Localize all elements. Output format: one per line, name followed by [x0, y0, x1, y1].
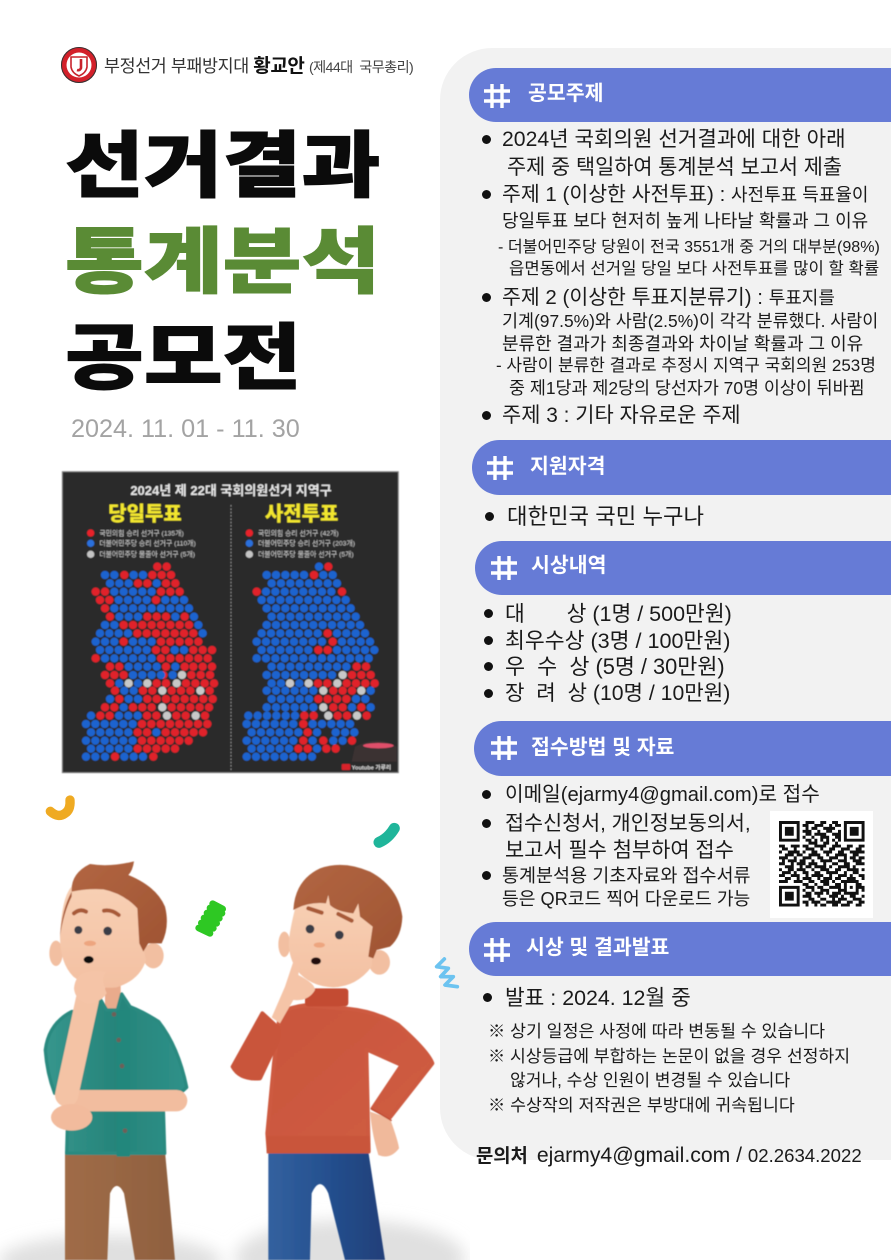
topic 2: 주제 2 (이상한 투표지분류기) : 투표지를 [502, 286, 835, 309]
label: 사전투표: 사전투표 [265, 498, 338, 527]
map watermark: Youtube 가루리 [352, 763, 391, 771]
header: logo and organisation [61, 47, 413, 83]
QR code [770, 811, 873, 918]
map: early votes [247, 567, 376, 757]
section: 공모주제: 주제 중 택일하여 통계분석 보고서 제출 [507, 156, 842, 179]
label: 당일투표: 당일투표 [108, 498, 182, 527]
heading bar: 지원자격 [530, 455, 605, 478]
legend: 국민의힘 승리 선거구 (42개) [258, 528, 339, 537]
section: 공모주제: - 사람이 분류한 결과로 추정시 지역구 국회의원 253명 [496, 356, 876, 375]
eligibility: 대한민국 국민 누구나 [507, 504, 704, 529]
illustration: two thinking men [0, 795, 468, 1260]
section: 시상 및 결과발표: 않거나, 수상 인원이 변경될 수 있습니다 [510, 1071, 790, 1090]
heading bar [469, 68, 891, 122]
section: 공모주제: 기계(97.5%)와 사람(2.5%)이 각각 분류했다. 사람이 [502, 311, 878, 331]
legend: 더불어민주당 물줄아 선거구 (5개) [258, 550, 354, 559]
section: 공모주제: 분류한 결과가 최종결과와 차이날 확률과 그 이유 [502, 334, 863, 354]
heading bar [475, 541, 891, 595]
notes: ※ 상기 일정은 사정에 따라 변동될 수 있습니다 [488, 1021, 825, 1041]
title line 1: 선거결과 [65, 107, 380, 212]
decorative shape: teal [379, 828, 394, 842]
topic 1: 주제 1 (이상한 사전투표) : 사전투표 득표율이 [502, 183, 868, 206]
legend [87, 528, 355, 559]
title line 3: 공모전 [65, 299, 301, 404]
required documents: 접수신청서, 개인정보동의서, [505, 812, 751, 835]
date range: 2024. 11. 01 - 11. 30 [71, 415, 300, 443]
heading bar [472, 440, 891, 495]
map: same-day votes [86, 567, 217, 757]
heading bar: 접수방법 및 자료 [531, 736, 674, 759]
download note: 통계분석용 기초자료와 접수서류 [502, 865, 751, 886]
announcement date: 발표 : 2024. 12월 중 [505, 986, 691, 1010]
man 2 [233, 865, 432, 1260]
man 1 [45, 861, 187, 1260]
section: 공모주제: 중 제1당과 제2당의 당선자가 70명 이상이 뒤바뀜 [509, 378, 865, 398]
topic 3: 주제 3 : 기타 자유로운 주제 [502, 404, 741, 427]
panel: right gray background [440, 48, 891, 1160]
section: 접수방법 및 자료: 보고서 필수 첨부하여 접수 [505, 839, 734, 862]
contact line: 문의처 ejarmy4@gmail.com / 02.2634.2022 [476, 1144, 862, 1167]
floor shadows [0, 1220, 465, 1260]
decorative shape: blue squiggle [437, 959, 457, 987]
map watermark [342, 741, 397, 771]
prize list: 대 상 (1명 / 500만원) [505, 602, 732, 626]
heading bar [469, 922, 891, 976]
prize list [484, 602, 732, 705]
section: 시상내역 [475, 541, 891, 705]
prize list: 우 수 상 (5명 / 30만원) [505, 654, 725, 679]
section: 시상 및 결과발표: ※ 시상등급에 부합하는 논문이 없을 경우 선정하지 [488, 1046, 850, 1066]
section: 공모주제: - 더불어민주당 당원이 전국 3551개 중 거의 대부분(98%) [498, 238, 880, 256]
heading bar: 시상내역 [531, 554, 606, 577]
legend: 국민의힘 승리 선거구 (135개) [99, 528, 184, 537]
heading bar: 시상 및 결과발표 [526, 936, 669, 959]
title line 2: 통계분석 [65, 203, 380, 308]
section: 공모주제 [469, 68, 891, 427]
legend: 더불어민주당 승리 선거구 (203개) [258, 539, 355, 548]
prize list: 최우수상 (3명 / 100만원) [505, 628, 730, 653]
organisation name: 부정선거 부패방지대 황교안 (제44대 국무총리) [104, 56, 413, 77]
section: 접수방법 및 자료: 등은 QR코드 찍어 다운로드 가능 [502, 889, 750, 909]
icon: red circular emblem [61, 47, 97, 83]
title: 선거결과 통계분석 공모전 [65, 107, 380, 404]
section: 시상 및 결과발표 [469, 922, 891, 1115]
topic intro: 2024년 국회의원 선거결과에 대한 아래 [502, 128, 846, 151]
election map image [61, 470, 400, 774]
section: 시상 및 결과발표: ※ 수상작의 저작권은 부방대에 귀속됩니다 [488, 1095, 795, 1115]
legend: 더불어민주당 물줄아 선거구 (5개) [99, 550, 195, 559]
section: 접수방법 및 자료 [474, 721, 891, 909]
map title: 2024년 제 22대 국회의원선거 지역구 [130, 483, 332, 498]
prize list: 장 려 상 (10명 / 10만원) [505, 682, 730, 705]
email: 이메일(ejarmy4@gmail.com)로 접수 [505, 784, 820, 806]
heading bar: 공모주제 [528, 82, 603, 105]
section: 공모주제: 당일투표 보다 현저히 높게 나타날 확률과 그 이유 [502, 211, 868, 231]
legend: 더불어민주당 승리 선거구 (110개) [99, 539, 196, 548]
decorative shape: green spring [199, 904, 223, 933]
section: 공모주제: 읍면동에서 선거일 당일 보다 사전투표를 많이 할 확률 [509, 259, 879, 278]
heading bar [474, 721, 891, 776]
section: 지원자격 [472, 440, 891, 529]
decorative shape: yellow [50, 800, 70, 815]
